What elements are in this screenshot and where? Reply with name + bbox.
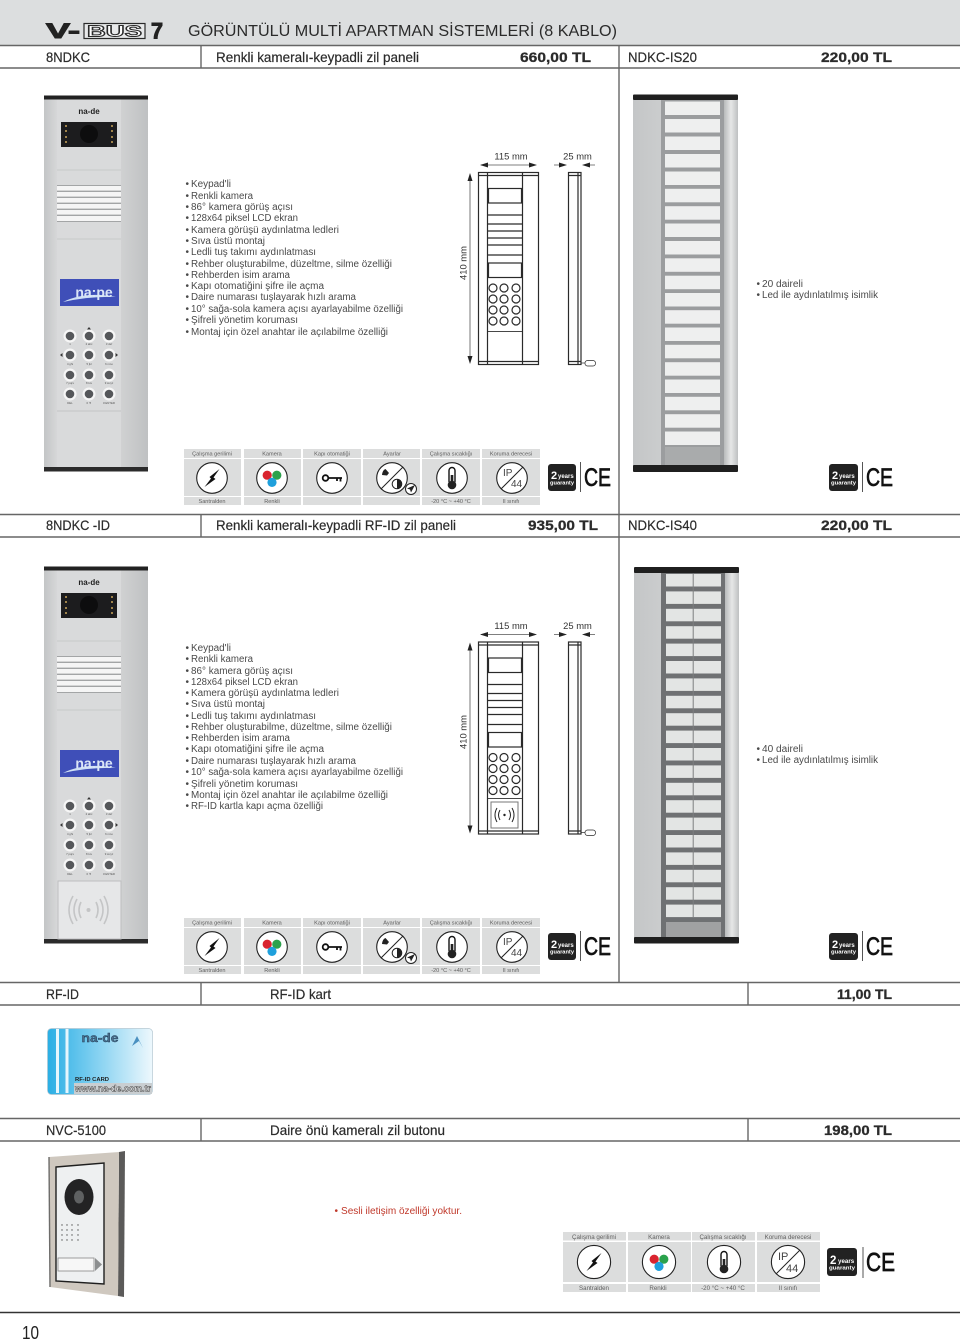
icon strip: 8NDKC features: Çalışma sıcaklığı	[430, 452, 473, 458]
note: no audio: •	[334, 1206, 338, 1217]
icon strip: NVC-5100 features: -20 °C ~ +40 °C	[701, 1285, 745, 1292]
feature list: 8NDKC: 86° kamera görüş açısı	[191, 202, 293, 213]
feature list: 8NDKC-ID: •	[186, 688, 190, 699]
feature list: 8NDKC: 10° sağa-sola kamera açısı ayarlayabilme özelliği	[191, 304, 403, 315]
row: 8NDKC-ID	[46, 517, 892, 533]
feature list: 8NDKC-ID: Rehber oluşturabilme, düzeltme, silme özelliği	[191, 722, 392, 733]
icon strip: 8NDKC-ID features	[184, 918, 540, 974]
feature list: 8NDKC: •	[186, 213, 190, 224]
icon strip: 8NDKC-ID features: Çalışma gerilimi	[192, 920, 232, 926]
badges: 8NDKC-ID: 2	[551, 939, 557, 951]
feature list: 8NDKC-ID: •	[186, 654, 190, 665]
feature list: 8NDKC-ID: •	[186, 666, 190, 677]
dimension drawing: 8NDKC-ID	[458, 620, 596, 836]
logo: V-BUS 7: V-	[46, 20, 80, 43]
icon strip: 8NDKC features: -20 °C ~ +40 °C	[431, 499, 471, 505]
product photo: NVC-5100	[49, 1151, 125, 1297]
icon strip: NVC-5100 features: IP	[778, 1251, 788, 1263]
row: RF-ID: RF-ID kart	[270, 986, 331, 1002]
icon strip: 8NDKC features: Renkli	[264, 499, 280, 505]
badges: NDKC-IS40: 2	[832, 939, 838, 951]
row: 8NDKC: 8NDKC	[46, 49, 90, 65]
icon strip: NVC-5100 features: 44	[786, 1263, 798, 1275]
product photo: 8NDKC panel: 6 mno	[105, 362, 113, 366]
product photo: 8NDKC panel: 5 jkl	[87, 362, 92, 366]
feature list: 8NDKC: Ledli tuş takımı aydınlatması	[191, 247, 316, 258]
feature list: 8NDKC: •	[186, 236, 190, 247]
feature list: NDKC-IS40: Led ile aydınlatılmış isimlik	[762, 755, 879, 766]
feature list: 8NDKC-ID: RF-ID kartla kapı açma özelliği	[191, 801, 323, 812]
product photo: 8NDKC-ID panel: na-de	[78, 578, 100, 587]
badges: NVC-5100: 2	[830, 1255, 836, 1267]
icon strip: NVC-5100 features: Çalışma sıcaklığı	[699, 1234, 747, 1241]
feature list: 8NDKC: •	[186, 327, 190, 338]
badges: 2 years guaranty and CE: CE	[584, 464, 611, 492]
product photo: 8NDKC panel: 3 def	[106, 342, 112, 346]
dimension drawing: 8NDKC-ID: 410 mm	[458, 715, 468, 749]
product photo: 8NDKC-ID panel: 0 ▼	[86, 872, 92, 876]
feature list: 8NDKC	[186, 179, 403, 338]
product photo: 8NDKC panel: na:pe	[75, 284, 113, 300]
title: GÖRÜNTÜLÜ MULTİ APARTMAN SİSTEMLERİ (8 KABLO)	[188, 22, 617, 40]
feature list: 8NDKC: Montaj için özel anahtar ile açılabilme özelliği	[191, 327, 388, 338]
feature list: 8NDKC-ID: •	[186, 767, 190, 778]
icon strip: 8NDKC-ID features: 44	[511, 948, 523, 959]
product photo: 8NDKC-ID panel: # ENTER	[103, 872, 115, 876]
badges: 2 years guaranty and CE: guaranty	[550, 480, 574, 486]
feature list: 8NDKC: Şifreli yönetim koruması	[191, 315, 298, 326]
product photo: 8NDKC panel: 1	[69, 342, 71, 346]
badges: 8NDKC-ID: guaranty	[550, 950, 574, 956]
icon strip: 8NDKC-ID features: Kamera	[262, 920, 283, 926]
product photo: 8NDKC-ID panel: 9 wxyz	[105, 852, 114, 856]
product photo: 8NDKC-ID panel: 8 tuv	[86, 852, 93, 856]
logo: V-BUS 7: 7	[151, 18, 163, 44]
badges: NDKC-IS20: years	[839, 474, 855, 480]
feature list: 8NDKC: •	[186, 259, 190, 270]
icon strip: 8NDKC-ID features: Koruma derecesi	[490, 920, 532, 926]
badges: NDKC-IS40: CE	[866, 933, 893, 961]
feature list: 8NDKC: •	[186, 225, 190, 236]
icon strip: NVC-5100 features: Renkli	[649, 1285, 667, 1292]
badges: NVC-5100: years	[838, 1258, 855, 1265]
badges: 8NDKC-ID: CE	[584, 933, 611, 961]
badges: NDKC-IS20: 2	[832, 470, 838, 482]
product photo: NDKC-IS20	[633, 94, 738, 472]
feature list: NDKC-IS40: •	[756, 744, 760, 755]
product photo: 8NDKC panel: 0 ▼	[86, 401, 92, 405]
icon strip: 8NDKC features: Kamera	[262, 452, 283, 458]
product photo: 8NDKC-ID panel: 7 pqrs	[66, 852, 74, 856]
feature list: 8NDKC: •	[186, 270, 190, 281]
feature list: 8NDKC-ID: •	[186, 790, 190, 801]
icon strip: 8NDKC features: II sınıfı	[503, 499, 520, 505]
feature list: 8NDKC-ID: Kapı otomatiğini şifre ile açma	[191, 744, 324, 755]
badges: NDKC-IS20	[829, 462, 893, 492]
product photo: 8NDKC panel: 7 pqrs	[66, 381, 74, 385]
row: NVC-5100: NVC-5100	[46, 1122, 106, 1138]
badges: NVC-5100	[827, 1247, 895, 1278]
row: RF-ID	[46, 986, 892, 1002]
feature list: 8NDKC: Renkli kamera	[191, 191, 253, 202]
row: 8NDKC-ID: 8NDKC -ID	[46, 517, 110, 533]
icon strip: 8NDKC-ID features: Kapı otomatiği	[314, 920, 350, 926]
row: RF-ID: RF-ID	[46, 986, 79, 1002]
dimension drawing: 8NDKC: 25 mm	[563, 150, 592, 162]
badges: NDKC-IS20: CE	[866, 464, 893, 492]
product photo: 8NDKC panel: 9 wxyz	[105, 381, 114, 385]
icon strip: 8NDKC features: Ayarlar	[383, 452, 401, 458]
icon strip: NVC-5100 features	[563, 1232, 820, 1292]
feature list: 8NDKC-ID: •	[186, 643, 190, 654]
icon strip: 8NDKC features: Santralden	[198, 499, 226, 505]
logo: V-BUS 7: BUS	[87, 24, 143, 40]
feature list: 8NDKC-ID: •	[186, 779, 190, 790]
icon strip: 8NDKC-ID features: -20 °C ~ +40 °C	[431, 968, 471, 974]
feature list: 8NDKC-ID: •	[186, 801, 190, 812]
feature list: 8NDKC: •	[186, 281, 190, 292]
icon strip: 8NDKC-ID features: Santralden	[198, 968, 226, 974]
product photo: 8NDKC-ID panel: 5 jkl	[87, 832, 92, 836]
row: 8NDKC: Renkli kameralı-keypadli zil paneli	[216, 49, 419, 65]
badges: 2 years guaranty and CE	[548, 462, 611, 492]
dimension drawing: 8NDKC-ID: 115 mm	[494, 620, 528, 631]
icon strip: 8NDKC features: Koruma derecesi	[490, 452, 532, 458]
feature list: 8NDKC-ID: Daire numarası tuşlayarak hızlı arama	[191, 756, 356, 767]
feature list: 8NDKC-ID: Ledli tuş takımı aydınlatması	[191, 711, 316, 722]
feature list: 8NDKC-ID: Montaj için özel anahtar ile açılabilme özelliği	[191, 790, 388, 801]
feature list: NDKC-IS20: •	[756, 279, 760, 290]
feature list: 8NDKC: •	[186, 191, 190, 202]
icon strip: NVC-5100 features: Koruma derecesi	[765, 1234, 811, 1241]
feature list: 8NDKC: •	[186, 247, 190, 258]
product photo: 8NDKC panel: # ENTER	[103, 401, 115, 405]
icon strip: 8NDKC-ID features: IP	[503, 937, 513, 948]
product photo: RF-ID card: na-de	[82, 1031, 119, 1045]
feature list: NDKC-IS20	[756, 279, 879, 301]
feature list: 8NDKC-ID: •	[186, 711, 190, 722]
row: 8NDKC: 660,00 TL	[520, 49, 591, 65]
row: NVC-5100	[46, 1122, 892, 1138]
feature list: 8NDKC-ID: Kamera görüşü aydınlatma ledleri	[191, 688, 339, 699]
icon strip: 8NDKC-ID features: Ayarlar	[383, 920, 401, 926]
feature list: 8NDKC: Daire numarası tuşlayarak hızlı arama	[191, 292, 356, 303]
feature list: 8NDKC: •	[186, 304, 190, 315]
feature list: 8NDKC-ID: 10° sağa-sola kamera açısı ayarlayabilme özelliği	[191, 767, 403, 778]
icon strip: 8NDKC-ID features: Renkli	[264, 968, 280, 974]
note: no audio: Sesli iletişim özelliği yoktur.	[341, 1206, 462, 1217]
feature list: 8NDKC-ID: •	[186, 677, 190, 688]
icon strip: 8NDKC features	[184, 449, 540, 505]
feature list: 8NDKC: •	[186, 315, 190, 326]
feature list: 8NDKC-ID: •	[186, 744, 190, 755]
icon strip: 8NDKC-ID features: Çalışma sıcaklığı	[430, 920, 473, 926]
logo: V-BUS 7	[46, 18, 163, 44]
feature list: NDKC-IS20: Led ile aydınlatılmış isimlik	[762, 290, 879, 301]
feature list: 8NDKC-ID: •	[186, 756, 190, 767]
row: 8NDKC-ID: 220,00 TL	[821, 517, 892, 533]
row: 8NDKC: NDKC-IS20	[628, 49, 697, 65]
icon strip: 8NDKC features: IP	[503, 468, 513, 479]
badges: NDKC-IS40: years	[839, 943, 855, 949]
icon strip: 8NDKC-ID features: II sınıfı	[503, 968, 520, 974]
product photo: 8NDKC-ID panel: na:pe	[75, 755, 113, 771]
badges: NDKC-IS40	[829, 931, 893, 961]
row: 8NDKC-ID: Renkli kameralı-keypadli RF-ID zil paneli	[216, 517, 456, 533]
feature list: 8NDKC-ID: Renkli kamera	[191, 654, 253, 665]
product photo: 8NDKC panel: na-de	[78, 107, 100, 116]
feature list: 8NDKC: Kapı otomatiğini şifre ile açma	[191, 281, 324, 292]
product photo: RF-ID card: www.na-de.com.tr	[74, 1084, 151, 1094]
icon strip: 8NDKC features: Kapı otomatiği	[314, 452, 350, 458]
product photo: 8NDKC-ID panel: 6 mno	[105, 832, 113, 836]
icon strip: 8NDKC features: Çalışma gerilimi	[192, 452, 232, 458]
feature list: 8NDKC-ID: •	[186, 699, 190, 710]
badges: NVC-5100: CE	[866, 1247, 895, 1277]
product photo: 8NDKC-ID panel: 2 abc	[86, 812, 93, 816]
feature list: 8NDKC-ID: •	[186, 722, 190, 733]
feature list: 8NDKC: Rehber oluşturabilme, düzeltme, silme özelliği	[191, 259, 392, 270]
product photo: RF-ID card	[48, 1028, 152, 1094]
feature list: 8NDKC-ID: Rehberden isim arama	[191, 733, 290, 744]
row: 8NDKC-ID: 935,00 TL	[528, 517, 598, 533]
feature list: 8NDKC: 128x64 piksel LCD ekran	[191, 213, 298, 224]
row: RF-ID: 11,00 TL	[837, 986, 892, 1002]
feature list: NDKC-IS40: •	[756, 755, 760, 766]
icon strip: 8NDKC features: 44	[511, 479, 523, 490]
header band	[0, 0, 960, 45]
product photo: 8NDKC-ID panel	[44, 566, 148, 944]
row: 8NDKC	[46, 49, 892, 65]
badges: 8NDKC-ID	[548, 931, 611, 961]
product photo: 8NDKC-ID panel: 4 ghi	[67, 832, 73, 836]
icon strip: NVC-5100 features: II sınıfı	[779, 1285, 798, 1292]
product photo: 8NDKC panel: 8 tuv	[86, 381, 93, 385]
badges: NDKC-IS40: guaranty	[831, 950, 856, 956]
dimension drawing: 8NDKC	[458, 150, 596, 366]
icon strip: NVC-5100 features: Çalışma gerilimi	[572, 1234, 616, 1241]
product photo: 8NDKC-ID panel: 1	[69, 812, 71, 816]
product photo: 8NDKC panel	[44, 96, 148, 472]
feature list: NDKC-IS20: 20 daireli	[762, 279, 803, 290]
feature list: 8NDKC: Kamera görüşü aydınlatma ledleri	[191, 225, 339, 236]
badges: 2 years guaranty and CE: 2	[551, 470, 557, 482]
badges: 2 years guaranty and CE: years	[558, 474, 574, 480]
product photo: 8NDKC panel: 2 abc	[86, 342, 93, 346]
dimension drawing: 8NDKC: 410 mm	[458, 246, 468, 280]
product photo: 8NDKC-ID panel: DEL	[67, 872, 73, 876]
dimension drawing: 8NDKC-ID: 25 mm	[563, 620, 592, 631]
feature list: 8NDKC: Keypad'li	[191, 179, 231, 190]
feature list: 8NDKC-ID: Sıva üstü montaj	[191, 699, 265, 710]
feature list: 8NDKC: Sıva üstü montaj	[191, 236, 265, 247]
product photo: 8NDKC-ID panel: 3 def	[106, 812, 112, 816]
product photo: 8NDKC panel: 4 ghi	[67, 362, 73, 366]
feature list: 8NDKC-ID: 128x64 piksel LCD ekran	[191, 677, 298, 688]
icon strip: NVC-5100 features: Kamera	[648, 1234, 670, 1241]
product photo: RF-ID card: RF-ID CARD	[75, 1077, 109, 1083]
row: NVC-5100: 198,00 TL	[824, 1122, 892, 1138]
feature list: 8NDKC: •	[186, 292, 190, 303]
feature list: 8NDKC: Rehberden isim arama	[191, 270, 290, 281]
icon strip: NVC-5100 features: Santralden	[579, 1285, 610, 1292]
feature list: NDKC-IS40	[756, 744, 879, 766]
badges: 8NDKC-ID: years	[558, 943, 574, 949]
badges: NDKC-IS20: guaranty	[831, 480, 856, 486]
row: NVC-5100: Daire önü kameralı zil butonu	[270, 1122, 445, 1138]
row: 8NDKC: 220,00 TL	[821, 49, 892, 65]
product photo: 8NDKC panel: DEL	[67, 401, 73, 405]
feature list: 8NDKC-ID: Keypad'li	[191, 643, 231, 654]
product photo: NDKC-IS40	[634, 567, 739, 944]
dimension drawing: 8NDKC: 115 mm	[494, 150, 528, 162]
feature list: 8NDKC-ID: 86° kamera görüş açısı	[191, 666, 293, 677]
feature list: NDKC-IS40: 40 daireli	[762, 744, 803, 755]
feature list: 8NDKC: •	[186, 179, 190, 190]
feature list: 8NDKC-ID	[186, 643, 403, 812]
feature list: 8NDKC-ID: •	[186, 733, 190, 744]
feature list: 8NDKC: •	[186, 202, 190, 213]
feature list: NDKC-IS20: •	[756, 290, 760, 301]
badges: NVC-5100: guaranty	[829, 1266, 855, 1272]
row: 8NDKC-ID: NDKC-IS40	[628, 517, 697, 533]
feature list: 8NDKC-ID: Şifreli yönetim koruması	[191, 779, 298, 790]
